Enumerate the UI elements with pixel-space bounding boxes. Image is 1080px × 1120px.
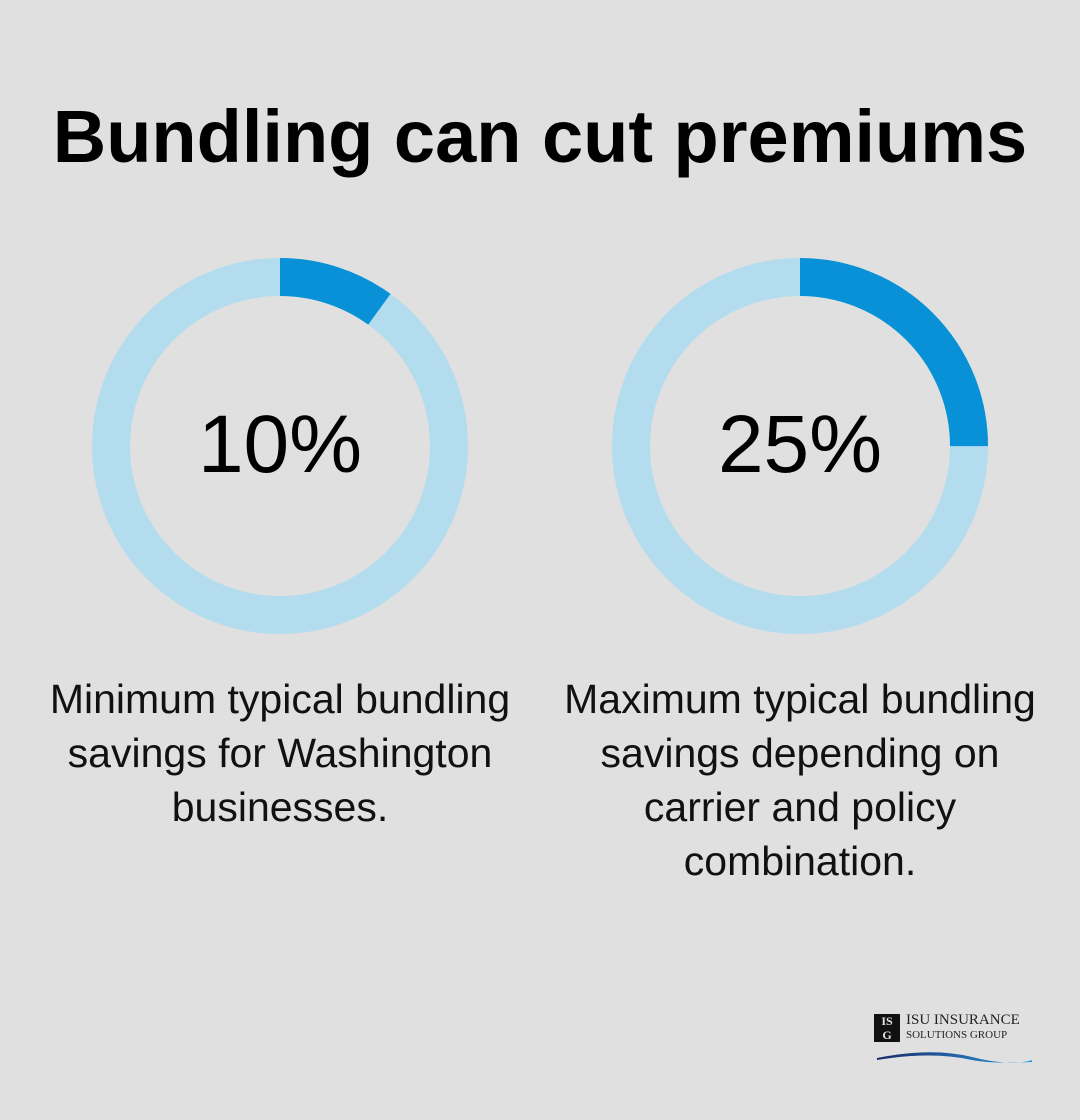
caption: left: Minimum typical bundling savings for Washington businesses.	[50, 676, 510, 830]
logo: IS	[881, 1014, 893, 1028]
logo: G	[882, 1028, 892, 1042]
donut: 10%	[92, 258, 468, 634]
logo: ISU INSURANCE	[906, 1012, 1020, 1028]
title: Bundling can cut premiums	[53, 95, 1027, 178]
donut: 10%: 10%	[198, 399, 362, 490]
logo	[874, 1012, 1032, 1063]
donut: 25%: 25%	[718, 399, 882, 490]
donut: 25%	[612, 258, 988, 634]
logo: SOLUTIONS GROUP	[906, 1029, 1007, 1041]
caption: right: Maximum typical bundling savings depending on carrier and policy combination.	[564, 676, 1036, 884]
